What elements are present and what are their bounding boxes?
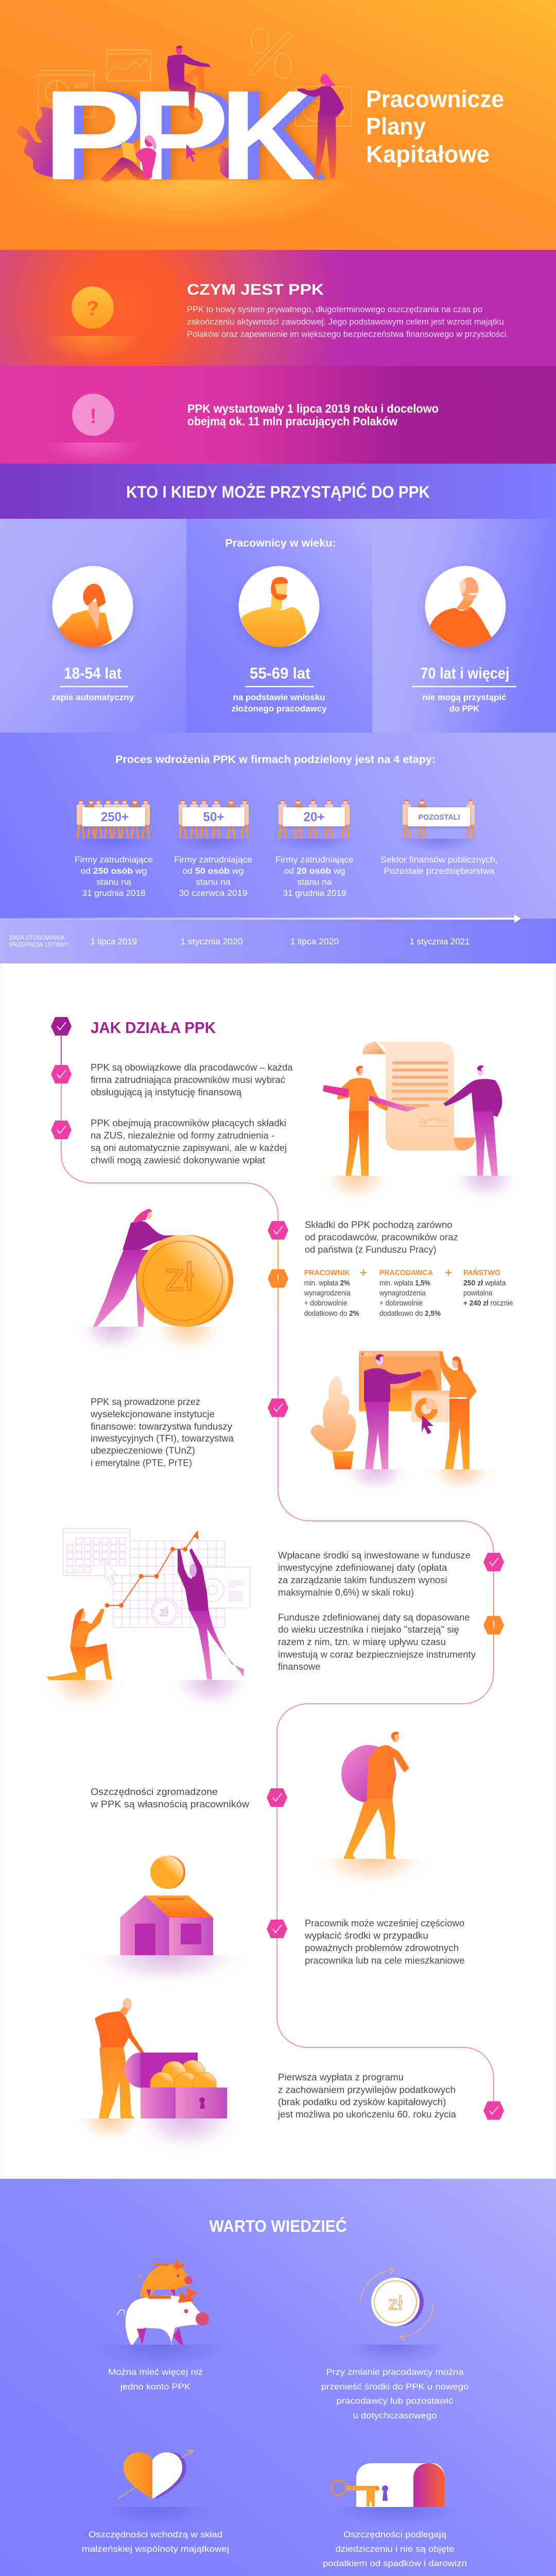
- text: contributions: [305, 1220, 458, 1255]
- text: investing: za zarządzanie takim funduszem wynosi: [278, 1575, 447, 1585]
- age card 70+: nie mogą przystąpić: [422, 692, 507, 702]
- text: marital property: [82, 2530, 229, 2554]
- illustration: growth chart: zł: [159, 1605, 168, 1619]
- stage 50+: Firmy zatrudniające: [174, 855, 252, 865]
- illustration: growth chart: [41, 1529, 253, 1712]
- text: changing employer: [321, 2367, 468, 2420]
- panel: hero: [0, 0, 556, 250]
- description: [187, 304, 509, 339]
- marker 5: exclamation: [268, 1269, 288, 1288]
- stage others: Sektor finansów publicznych,: [380, 855, 498, 865]
- text: ownership: w PPK są własnością pracowników: [90, 1799, 250, 1809]
- heading: JAK DZIAŁA PPK: [91, 1019, 216, 1037]
- text: investing: [278, 1550, 471, 1598]
- stage 250+: stanu na: [96, 878, 132, 887]
- text: early withdrawal: poważnych problemów zdrowotnych: [305, 1943, 459, 1953]
- column: employer: [379, 1268, 441, 1318]
- text: target date funds: Fundusze zdefiniowanej daty są dopasowane: [278, 1613, 470, 1623]
- text: changing employer: pracodawcy lub pozostawić: [337, 2396, 454, 2405]
- stage others: [380, 800, 498, 876]
- age card 18-54: [51, 566, 134, 702]
- text: institutions: wyselekcjonowane instytucje: [90, 1409, 215, 1419]
- column: employer: min. wpłata 1,5%: [379, 1279, 430, 1287]
- text: changing employer: u dotychczasowego: [353, 2411, 437, 2420]
- stage 20+: 20+: [304, 810, 324, 824]
- dates: [91, 937, 470, 946]
- line icons: chart windows and percent: [38, 28, 352, 126]
- text: investing: Wpłacane środki są inwestowane w fundusze: [278, 1550, 471, 1561]
- text: investing: maksymalnie 0,6%) w skali roku): [278, 1587, 414, 1598]
- woman: [445, 1399, 470, 1469]
- marker 9: [267, 1788, 287, 1807]
- stage 20+: stanu na: [297, 878, 333, 887]
- plant: [310, 1376, 356, 1451]
- text: inheritance: [323, 2530, 467, 2568]
- illustration: signing contract: [319, 1042, 523, 1204]
- stage 250+: 31 grudnia 2018: [82, 889, 145, 898]
- plus: [445, 1269, 451, 1276]
- big PPK lettering: P: [43, 64, 142, 207]
- illustration: woman pushing coin: zł: [165, 1254, 194, 1299]
- heading: Pracownicy w wieku:: [225, 537, 336, 549]
- label: [10, 935, 70, 948]
- text: coverage: na ZUS, niezależnie od formy zatrudnienia -: [91, 1130, 274, 1141]
- left man: [345, 1111, 369, 1176]
- icon: exclamation: !: [90, 405, 97, 428]
- text: marital property: Oszczędności wchodzą w skład: [89, 2530, 222, 2539]
- plus: [360, 1269, 367, 1276]
- stage 250+: Firmy zatrudniające: [75, 855, 153, 865]
- text: early withdrawal: pracownika lub na cele mieszkaniowe: [305, 1956, 465, 1966]
- figure: sitting woman with tablet: [100, 135, 156, 182]
- text: obligation: obsługującą ją instytucję finansową: [91, 1087, 242, 1097]
- panel: timeline band: [0, 914, 556, 963]
- panel: who and when header: [0, 464, 556, 519]
- subtitle: Plany: [366, 113, 426, 140]
- text: contributions: od pracodawców, pracowników oraz: [305, 1232, 458, 1243]
- column: employee: dodatkowo do 2%: [304, 1310, 359, 1318]
- column: employee: wynagrodzenia: [304, 1289, 351, 1297]
- marker 3: [51, 1121, 72, 1139]
- text: institutions: ubezpieczeniowe (TUnŻ): [91, 1446, 195, 1456]
- figure: sitting man: [167, 45, 212, 121]
- marker 1: [51, 1017, 72, 1036]
- statement: obejmą ok. 11 mln pracujących Polaków: [187, 414, 397, 428]
- stage 50+: stanu na: [196, 878, 231, 887]
- dates: 1 stycznia 2021: [410, 937, 470, 946]
- text: marital property: małżeńskiej wspólnoty majątkowej: [82, 2544, 229, 2554]
- column: employee: PRACOWNIK: [304, 1268, 350, 1277]
- text: first payout: Pierwsza wypłata z programu: [278, 2072, 404, 2082]
- figure: standing woman: [298, 74, 344, 178]
- dates: 1 lipca 2020: [290, 937, 339, 946]
- stage 20+: [273, 800, 355, 898]
- text: coverage: są oni automatycznie zapisywani, ale w każdej: [91, 1143, 287, 1153]
- dates: 1 stycznia 2020: [180, 937, 243, 946]
- man: [189, 1609, 244, 1680]
- man: [365, 1402, 389, 1469]
- column: employee: + dobrowolnie: [304, 1299, 348, 1308]
- icon: question mark: [43, 286, 142, 361]
- text: coverage: [91, 1118, 287, 1165]
- text: first payout: z zachowaniem przywilejów podatkowych: [278, 2085, 456, 2095]
- panel: age groups: [0, 519, 556, 733]
- stage 20+: od 20 osób wg: [284, 867, 345, 876]
- age card 70+: [412, 566, 516, 714]
- text: coverage: chwili mogą zawiesić dokonywanie wpłat: [91, 1155, 265, 1165]
- subtitle: Kapitałowe: [366, 141, 490, 167]
- big PPK lettering: P: [130, 64, 230, 207]
- text: coverage: PPK obejmują pracowników płacących składki: [91, 1118, 286, 1128]
- age card 70+: 70 lat i więcej: [420, 664, 510, 682]
- text: obligation: PPK są obowiązkowe dla pracodawców – każda: [91, 1062, 293, 1073]
- text: contributions: od państwa (z Funduszu Pracy): [305, 1245, 437, 1255]
- text: investing: inwestycyjne zdefiniowanej daty (opłata: [278, 1563, 448, 1573]
- marker 7: [483, 1553, 504, 1571]
- stage others: POZOSTALI: [418, 813, 460, 822]
- column: employee: [304, 1268, 359, 1318]
- column: employee: min. wpłata 2%: [304, 1279, 350, 1287]
- stage 20+: Firmy zatrudniające: [275, 855, 354, 865]
- icon: key and vault: [331, 2463, 457, 2527]
- stage 50+: 30 czerwca 2019: [179, 889, 247, 898]
- subtitle: Pracownicze: [366, 86, 504, 112]
- column: state: [463, 1268, 513, 1308]
- column: state: PAŃSTWO: [463, 1268, 500, 1277]
- text: contributions: Składki do PPK pochodzą zarówno: [305, 1220, 452, 1230]
- big PPK lettering: P: [140, 64, 239, 207]
- column: state: powitalna: [463, 1289, 493, 1297]
- text: inheritance: dziedziczeniu i nie są objęte: [336, 2544, 454, 2554]
- panel: czym jest PPK: [0, 250, 556, 366]
- text: multiple accounts: jedno konto PPK: [120, 2382, 191, 2392]
- marker 11: [483, 2101, 504, 2120]
- big PPK lettering: P: [52, 64, 151, 207]
- text: inheritance: podatkiem od spadków i darowizn: [323, 2558, 467, 2568]
- stage 250+: [73, 800, 155, 898]
- icon: cursor: [186, 144, 197, 162]
- marker 8: exclamation: !: [492, 1619, 495, 1632]
- text: institutions: i emerytalne (PTE, PrTE): [91, 1458, 192, 1468]
- icon: coin transfer: zł: [388, 2293, 403, 2314]
- age card 55-69: 55-69 lat: [250, 664, 310, 682]
- label: PRZEPISÓW USTAWY:: [10, 942, 70, 948]
- icon: coin transfer: [344, 2268, 447, 2365]
- panel: rollout stages: [0, 733, 556, 919]
- text: institutions: [90, 1397, 234, 1468]
- illustration: woman pushing coin: [75, 1209, 233, 1355]
- stage 50+: [172, 800, 255, 898]
- ground glow: [15, 180, 360, 231]
- marker 10: [267, 1920, 287, 1938]
- text: changing employer: Przy zmianie pracodawcy można: [326, 2367, 464, 2377]
- text: ownership: Oszczędności zgromadzone: [91, 1787, 218, 1797]
- stage others: Pozostałe przedsiębiorstwa: [384, 867, 495, 876]
- panel: start date: [0, 366, 556, 464]
- age card 18-54: zapis automatyczny: [51, 692, 134, 702]
- text: obligation: firma zatrudniająca pracowników musi wybrać: [91, 1075, 285, 1085]
- illustration: man carrying sack: [311, 1732, 433, 1890]
- marker 4: [268, 1221, 288, 1240]
- text: early withdrawal: Pracownik może wcześniej częściowo: [305, 1918, 464, 1928]
- heading: Proces wdrożenia PPK w firmach podzielony jest na 4 etapy:: [115, 754, 436, 766]
- text: target date funds: inwestują w coraz bezpieczniejsze instrumenty: [278, 1650, 476, 1660]
- column: employer: + dobrowolnie: [379, 1299, 423, 1308]
- text: target date funds: finansowe: [278, 1662, 321, 1672]
- text: target date funds: razem z nim, tzn. w miarę upływu czasu: [278, 1637, 446, 1647]
- text: first payout: [277, 2072, 457, 2120]
- text: early withdrawal: wypłacić środki w przypadku: [304, 1930, 428, 1941]
- description: zakończeniu aktywności zawodowej. Jego podstawowym celem jest wzrost majątku: [187, 317, 504, 327]
- column: state: 250 zł wpłata: [463, 1279, 506, 1287]
- woman: [47, 1643, 112, 1680]
- marker 2: [51, 1065, 72, 1083]
- panel: good to know: [0, 2179, 556, 2576]
- plants: [16, 107, 231, 179]
- panel: how PPK works: [0, 963, 556, 2179]
- column: employer: PRACODAWCA: [379, 1268, 433, 1277]
- text: inheritance: Oszczędności podlegają: [343, 2530, 447, 2539]
- text: multiple accounts: [108, 2367, 203, 2392]
- text: ownership: [90, 1787, 250, 1809]
- illustration: house and coin: [82, 1856, 252, 1989]
- panel: who and when header: KTO I KIEDY MOŻE PRZYSTĄPIĆ DO PPK: [126, 483, 430, 501]
- marker 6: [268, 1398, 288, 1417]
- description: Polaków oraz zapewnienie im większego bezpieczeństwa finansowego w przyszłości.: [187, 329, 509, 339]
- text: institutions: finansowe: towarzystwa funduszy: [91, 1421, 232, 1432]
- age card 55-69: [232, 566, 327, 714]
- right man: [473, 1111, 498, 1176]
- age card 70+: do PPK: [449, 704, 480, 714]
- age card 55-69: złożonego pracodawcy: [232, 704, 327, 714]
- icon: piggy banks: [93, 2259, 227, 2368]
- text: multiple accounts: Można mieć więcej niż: [108, 2367, 203, 2377]
- stage 250+: 250+: [101, 810, 129, 824]
- icon: heart: [99, 2450, 213, 2528]
- text: changing employer: przenieść środki do PPK u nowego: [321, 2382, 468, 2392]
- text: early withdrawal: [304, 1918, 465, 1966]
- connector path: [61, 1026, 494, 2107]
- stage 50+: od 50 osób wg: [182, 867, 244, 876]
- illustration: chart presentation: [310, 1351, 497, 1495]
- heading: CZYM JEST PPK: [187, 281, 324, 298]
- stage 20+: 31 grudnia 2019: [283, 889, 346, 898]
- illustration: treasure chest and old man: [74, 1998, 244, 2156]
- arrow: [0, 914, 521, 923]
- dates: 1 lipca 2019: [91, 937, 137, 946]
- text: first payout: jest możliwa po ukończeniu 60. roku życia: [277, 2109, 457, 2120]
- big PPK lettering: K: [231, 64, 327, 207]
- text: institutions: PPK są prowadzone przez: [91, 1397, 200, 1407]
- statement: PPK wystartowały 1 lipca 2019 roku i docelowo: [187, 402, 439, 415]
- column: employer: dodatkowo do 2,5%: [379, 1310, 441, 1318]
- big PPK lettering: K: [220, 64, 316, 207]
- text: target date funds: [278, 1613, 476, 1672]
- stage 50+: 50+: [203, 810, 224, 824]
- icon: exclamation: [44, 394, 143, 464]
- big PPK lettering: [43, 64, 327, 207]
- marker 8: exclamation: [483, 1616, 504, 1634]
- text: obligation: [91, 1062, 293, 1097]
- icon: question mark: ?: [86, 297, 99, 320]
- label: DATA STOSOWANIA: [10, 935, 65, 941]
- column: state: + 240 zł rocznie: [463, 1299, 513, 1308]
- text: target date funds: do wieku uczestnika i niejako "starzeją" się: [278, 1624, 459, 1635]
- statement: [187, 402, 439, 428]
- text: institutions: inwestycyjnych (TFI), towarzystwa: [91, 1433, 234, 1444]
- stage 250+: od 250 osób wg: [80, 867, 147, 876]
- subtitle: [366, 86, 504, 167]
- heading: WARTO WIEDZIEĆ: [209, 2217, 347, 2235]
- marker 5: exclamation: !: [276, 1272, 280, 1285]
- age card 55-69: na podstawie wniosku: [233, 692, 325, 702]
- age card 18-54: 18-54 lat: [64, 664, 121, 682]
- column: employer: wynagrodzenia: [379, 1289, 426, 1297]
- text: first payout: (brak podatku od zysków kapitałowych): [278, 2097, 446, 2107]
- description: PPK to nowy system prywatnego, długoterminowego oszczędzania na czas po: [187, 304, 482, 314]
